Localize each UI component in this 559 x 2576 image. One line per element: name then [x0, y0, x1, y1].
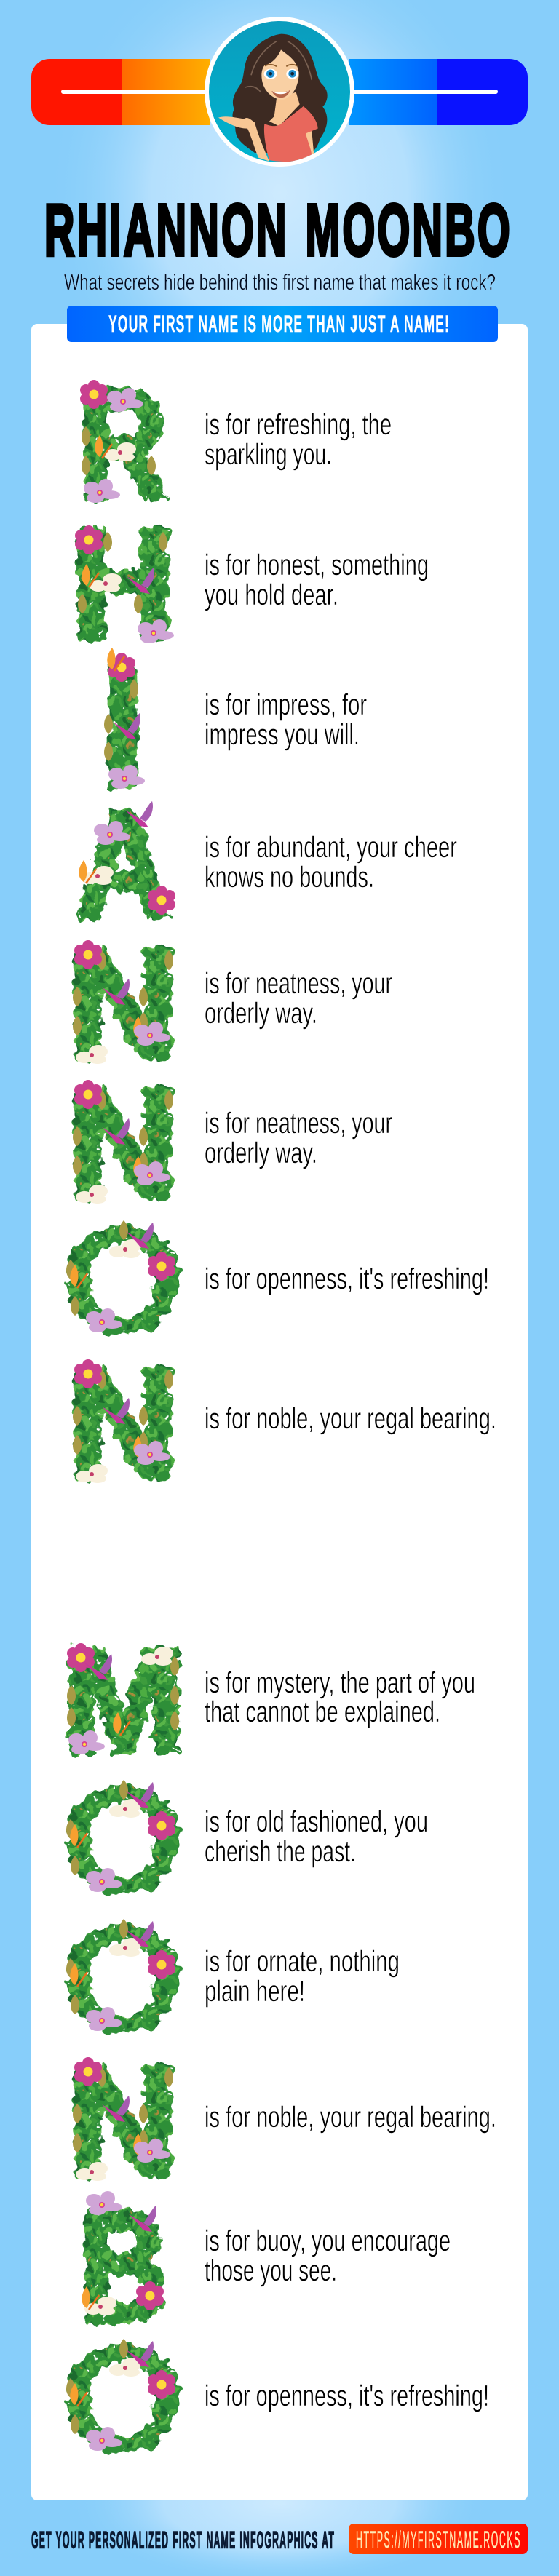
row: H: H: [72, 498, 174, 670]
row: I: [102, 633, 367, 820]
row: O third: plain here!: [205, 1974, 305, 2008]
row: R: R: [79, 358, 167, 530]
row: O second: [60, 1754, 428, 1925]
row: O third: is for ornate, nothing: [205, 1944, 400, 1978]
row: B: is for buoy, you encourage: [205, 2224, 451, 2257]
row: O second: O: [60, 1754, 186, 1925]
row: H: is for honest, something: [205, 548, 429, 581]
row: N second: is for neatness, your: [205, 1106, 392, 1140]
row: B: those you see.: [205, 2254, 337, 2287]
row: O last: O: [60, 2313, 186, 2484]
row: M: that cannot be explained.: [205, 1695, 440, 1728]
row: O second: is for old fashioned, you: [205, 1805, 428, 1838]
row: M: M: [62, 1619, 186, 1782]
row: N third: N: [69, 1337, 177, 1510]
row: A: knows no bounds.: [205, 860, 374, 894]
banner: [67, 306, 498, 342]
top colour bar: [31, 59, 528, 125]
row: N second: [69, 1057, 392, 1230]
row: R: is for refreshing, the: [205, 408, 392, 441]
row: R: [79, 358, 392, 530]
panel: letter meanings: [31, 324, 528, 2500]
row: R: sparkling you.: [205, 437, 332, 471]
row: N: orderly way.: [205, 996, 317, 1030]
row: N second: orderly way.: [205, 1136, 317, 1169]
avatar portrait: [207, 19, 352, 164]
row: N: N: [69, 918, 177, 1090]
row: A: [76, 780, 457, 947]
row: I: is for impress, for: [205, 688, 367, 721]
row: I: impress you will.: [205, 717, 360, 751]
row: N: [69, 918, 392, 1090]
row: I: I: [102, 633, 144, 820]
row: M: [62, 1619, 475, 1782]
row: O third: O: [60, 1893, 186, 2064]
row: O: O: [60, 1194, 186, 1365]
row: O second: cherish the past.: [205, 1834, 356, 1868]
row: N: is for neatness, your: [205, 966, 392, 1000]
row: N second: N: [69, 1057, 177, 1230]
row: B: [80, 2179, 451, 2353]
row: A: A: [76, 780, 170, 947]
row: N fourth: N: [69, 2035, 177, 2208]
row: H: you hold dear.: [205, 578, 338, 611]
row: B: B: [80, 2179, 167, 2353]
row: A: is for abundant, your cheer: [205, 830, 457, 864]
row: O third: [60, 1893, 400, 2064]
row: O last: [60, 2313, 489, 2484]
row: N third: [69, 1337, 496, 1510]
row: O: [60, 1194, 489, 1365]
row: N fourth: [69, 2035, 496, 2208]
row: H: [72, 498, 429, 670]
